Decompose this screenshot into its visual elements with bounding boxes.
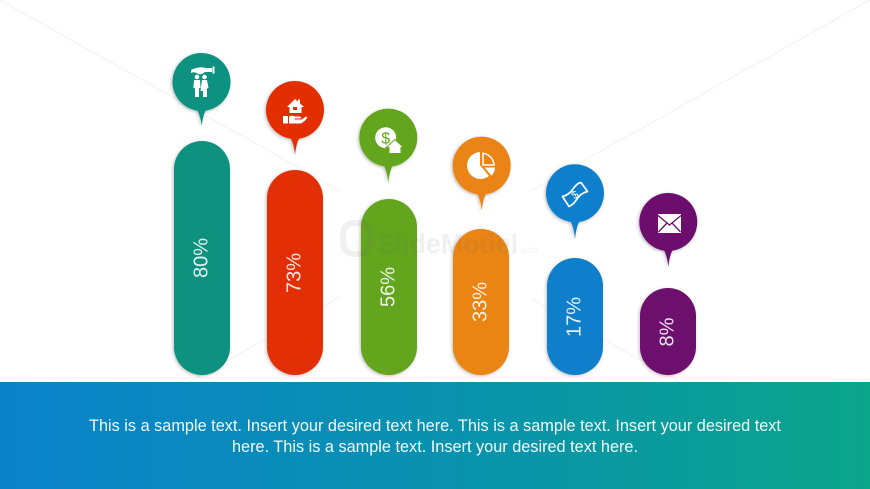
watermark: [343, 223, 538, 259]
icon: dollar coin and house: $: [381, 130, 390, 148]
icon: pie chart: [467, 152, 495, 179]
bar: 17%: [547, 258, 603, 375]
bar: 17%: 17%: [564, 296, 586, 337]
pin: banknote icon: [546, 164, 604, 239]
icon: house in hand: [283, 99, 307, 124]
bar: 80%: [174, 141, 230, 375]
pin: dollar and house icon: [359, 109, 417, 183]
pin: pie chart icon: [453, 137, 511, 210]
icon: family under hand: [191, 66, 214, 97]
footer text: [89, 417, 781, 456]
pin: family icon: [172, 53, 230, 126]
bar: 56%: 56%: [378, 267, 400, 307]
watermark: SlideModel: [377, 228, 518, 259]
bar: 56%: [361, 199, 417, 375]
pin: house in hand icon: [266, 81, 324, 155]
bar: 73%: [267, 170, 323, 375]
icon: envelope: [658, 214, 681, 233]
bar: 33%: 33%: [470, 282, 492, 322]
icon: banknote: $: [569, 189, 581, 202]
bar: 8%: [640, 288, 696, 375]
bar: 33%: [453, 229, 509, 375]
watermark: .com: [519, 245, 538, 256]
pin: envelope icon: [639, 193, 697, 267]
footer band: [0, 382, 870, 489]
bar: 73%: 73%: [284, 252, 306, 293]
bar: 80%: 80%: [190, 238, 212, 278]
bar: 8%: 8%: [656, 317, 678, 346]
footer text: This is a sample text. Insert your desired text here. This is a sample text. Insert your desired text: [89, 417, 781, 435]
footer text: here. This is a sample text. Insert your desired text here.: [232, 438, 638, 456]
